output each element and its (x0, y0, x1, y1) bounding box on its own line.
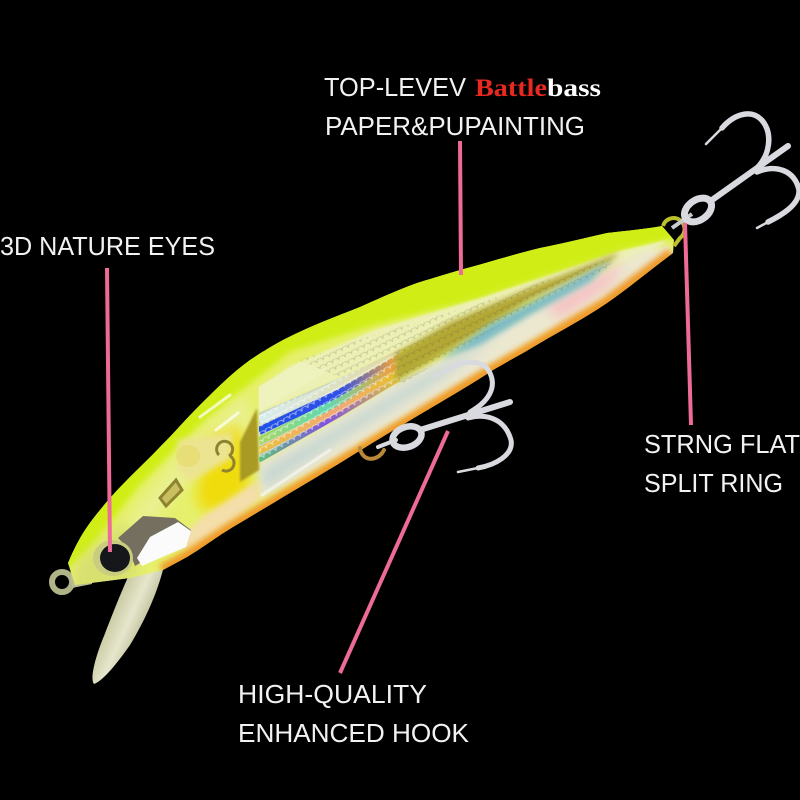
label: hook: HIGH-QUALITY (238, 679, 427, 709)
lime back band (68, 226, 674, 570)
label: hook (238, 679, 470, 748)
olive rear stripe (395, 252, 620, 382)
pointer line: split ring (685, 223, 691, 425)
lure: rear split ring (663, 214, 692, 246)
lure: 3D eye (93, 540, 133, 576)
lure: body (68, 226, 674, 585)
yellow head section (196, 425, 250, 512)
orange belly edge (163, 255, 673, 572)
pale nose (70, 526, 138, 584)
treble hook: belly (360, 362, 511, 472)
pale upper flank (259, 240, 668, 413)
pale lime head wash (120, 395, 258, 530)
label: split ring: SPLIT RING (644, 468, 783, 498)
holographic stripe (259, 349, 400, 463)
translucent round mark (176, 445, 200, 467)
internal weights (160, 441, 234, 506)
treble hook: tail (680, 114, 799, 228)
label: paper and painting (324, 72, 601, 141)
cream lower head (172, 480, 259, 550)
lure: silver eye plate (118, 516, 191, 566)
label: eyes: 3D NATURE EYES (0, 231, 215, 261)
label: paper and painting: TOP-LEVEV (324, 72, 467, 102)
lure: front split ring (52, 568, 92, 592)
rear scale texture (300, 255, 620, 385)
lure: diving lip (92, 566, 164, 684)
cool grey lower flank shade (255, 347, 484, 490)
olive gill shadow (240, 408, 259, 482)
pointer line: paint (460, 141, 461, 275)
pointer line: hook (340, 431, 448, 673)
label: paper and painting: Battle (475, 75, 547, 102)
cyan rear stripe (440, 260, 612, 360)
label: paper and painting: bass (547, 75, 601, 102)
pale lower flank (259, 245, 673, 500)
lure: white plate highlight (137, 522, 191, 566)
label: paper and painting: PAPER&PUPAINTING (325, 111, 585, 141)
hard left edge of upper flank (259, 362, 303, 412)
label: hook: ENHANCED HOOK (238, 718, 470, 748)
body highlights (200, 395, 330, 495)
label: split ring (644, 429, 800, 498)
body base colour (68, 226, 674, 585)
label: split ring: STRNG FLAT (644, 429, 800, 459)
pointer line: eye (107, 268, 110, 552)
pink belly reflection (545, 262, 625, 318)
cream gill panel (178, 432, 233, 482)
